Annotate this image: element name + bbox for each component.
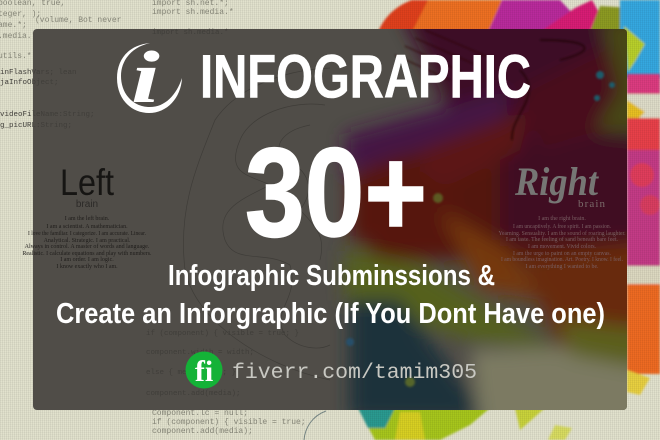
code lines in panel: component.width = width; (146, 349, 254, 357)
left brain block (22, 162, 152, 270)
title: INFOGRAPHIC (200, 42, 531, 110)
fiverr icon (186, 352, 222, 388)
code lines in panel (0, 29, 299, 398)
right heading: Right (514, 159, 600, 204)
right poem: I am the right brain. (538, 216, 586, 222)
big number: 30+ (245, 122, 427, 263)
right sub heading: brain (578, 198, 606, 210)
background: code text: (volume, Bot never (35, 16, 122, 25)
code lines in panel: import sh.media.* (152, 29, 229, 37)
subtitle line 1: Infographic Subminssions & (168, 260, 495, 292)
code lines in panel: inFlashVars; lean (0, 69, 77, 77)
left poem: I know exactly who I am. (56, 264, 118, 270)
right poem: I am movement. Vivid colors. (528, 244, 596, 250)
fiverr url: fiverr.com/tamim305 (232, 361, 477, 385)
code lines in panel: if (component) { visible = true; } (146, 330, 299, 338)
right brain block (498, 159, 626, 270)
left poem: Always in control. A master of words and language. (25, 243, 150, 250)
left heading: Left (60, 162, 115, 203)
right poem: I am everything I wanted to be. (526, 264, 599, 270)
background: code text: Component.lc = null; (152, 409, 248, 418)
left poem: I love the familiar. I categorize. I am accurate. Linear. (28, 230, 146, 237)
code lines in panel: g_picURL:String; (0, 122, 72, 130)
right poem: I am the urge to paint on an empty canvas. (513, 251, 611, 257)
background: code text: if (component) { visible = true; (152, 418, 306, 427)
crescent (117, 43, 182, 113)
arc at bottom edge (304, 411, 326, 440)
background: paint bottom (358, 408, 572, 440)
logo: italic i in crescent (117, 37, 182, 118)
right poem: I am taste. The feeling of sand beneath bare feet. (506, 236, 618, 243)
code lines in panel: else { media.load; } (146, 369, 236, 377)
code lines in panel: component.add(media); (146, 390, 241, 398)
code lines in panel: videoFileName:String; (0, 111, 95, 119)
panel: paint specks (346, 30, 615, 387)
left poem: I am a scientist. A mathematician. (46, 224, 128, 230)
fiverr icon: fi (195, 355, 213, 388)
background: code text (0, 0, 306, 436)
left poem (22, 215, 152, 270)
brain left hemisphere outline (183, 68, 330, 380)
panel (33, 29, 627, 410)
right poem: I am boundless imagination. Art. Poetry. I know. I feel. (501, 256, 623, 263)
code lines in panel: jaInfoObject; (0, 79, 59, 87)
letter i: i (131, 37, 160, 118)
background: paint top (378, 0, 660, 78)
left poem: I am the left brain. (65, 215, 110, 222)
background: code text: import sh.media.* (152, 8, 234, 17)
right poem: Yearning. Sensuality. I am the sound of roaring laughter. (498, 230, 626, 237)
left poem: I am order. I am logic. (60, 257, 114, 263)
left sub heading: brain (76, 199, 98, 210)
background: paint right (627, 74, 660, 395)
left poem: Realistic. I calculate equations and play with numbers. (22, 251, 152, 257)
panel: painting seen through overlay (334, 29, 627, 410)
right poem: I am uncaptively. A free spirit. I am passion. (513, 223, 611, 230)
left poem: Analytical. Strategic. I am practical. (44, 238, 131, 244)
background: code text: component.add(media); (152, 427, 253, 436)
right poem (498, 216, 626, 270)
